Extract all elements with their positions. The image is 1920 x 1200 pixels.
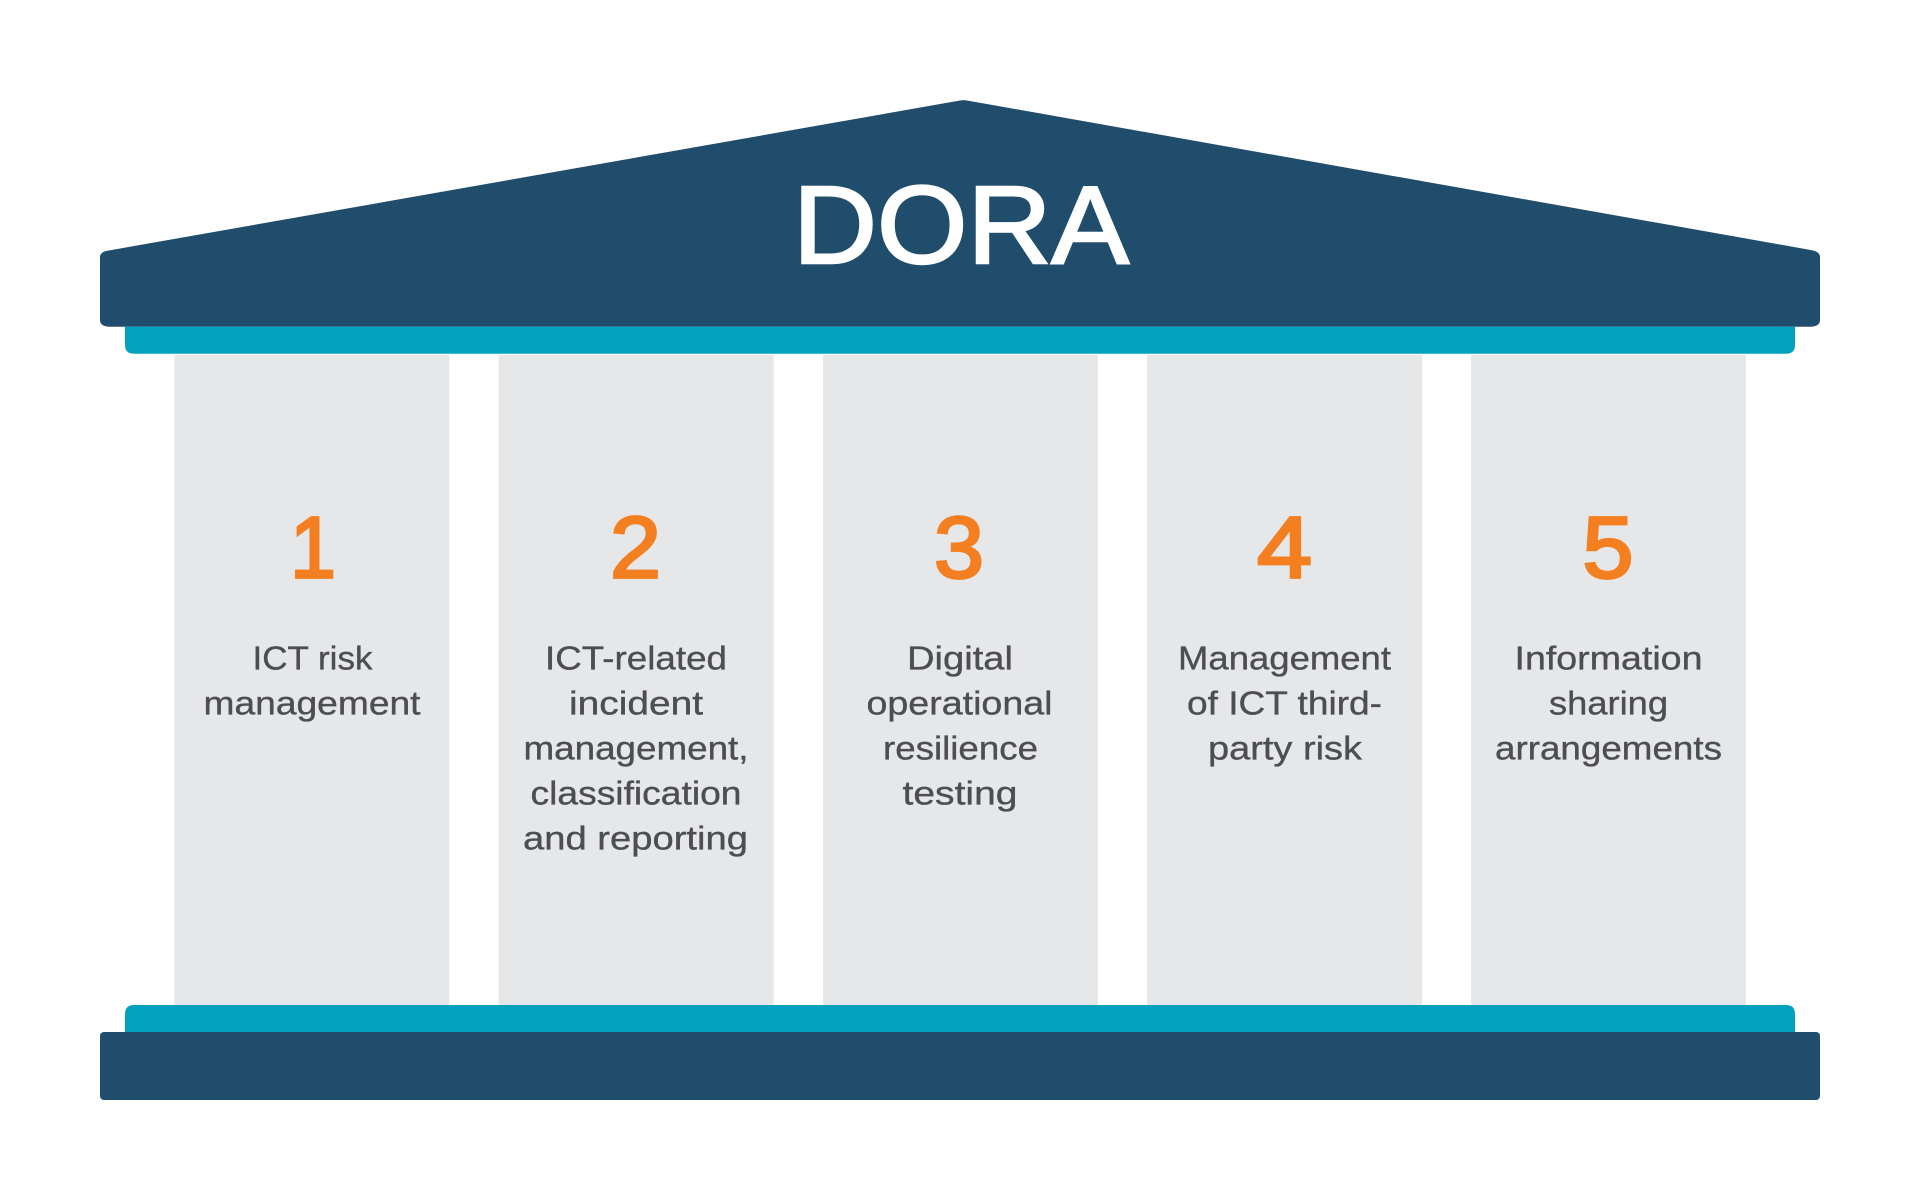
pillar label: Information [1514,639,1702,676]
number 1: 1 [290,500,336,596]
pillar background [499,355,774,1005]
pillar background [823,355,1098,1005]
pillar background [1471,355,1746,1005]
pillar 1 [174,355,449,1005]
pillar label: Management [1178,639,1391,676]
pillar label: Digital [907,639,1013,676]
pillar label [866,639,1052,812]
pillar label [523,639,748,856]
pillar label: incident [569,684,703,722]
roof shape [100,100,1820,327]
pillar label: arrangements [1495,730,1722,766]
pillar 5 [1471,355,1746,1005]
pillar label [1495,639,1722,766]
pillar 2 [499,355,774,1005]
top teal beam [125,327,1795,354]
pillar label [1178,639,1391,766]
roof with title [100,100,1820,327]
pillar label: resilience [883,730,1038,766]
pillar label: ICT risk [252,639,373,676]
pillar label: operational [866,684,1052,722]
number 2: 2 [610,500,661,596]
pillar label: classification [530,774,742,812]
bottom teal beam [125,1005,1795,1032]
pillar label: management [204,684,420,722]
pillar label: sharing [1549,684,1668,722]
number 5: 5 [1582,500,1634,596]
number 3: 3 [934,500,984,596]
pillar label: testing [902,774,1018,812]
number 4: 4 [1257,500,1312,596]
title: DORA: DORA [793,164,1130,287]
pillar label: of ICT third- [1187,684,1382,722]
pillar background [1147,355,1422,1005]
pillar label: ICT-related [545,639,727,676]
pillar label: party risk [1208,730,1363,766]
pillar label [204,639,420,722]
pillar 4 [1147,355,1422,1005]
pillar label: management, [524,730,748,766]
pillar label: and reporting [523,820,748,856]
pillar background [174,355,449,1005]
base plinth [100,1032,1820,1100]
pillar 3 [823,355,1098,1005]
